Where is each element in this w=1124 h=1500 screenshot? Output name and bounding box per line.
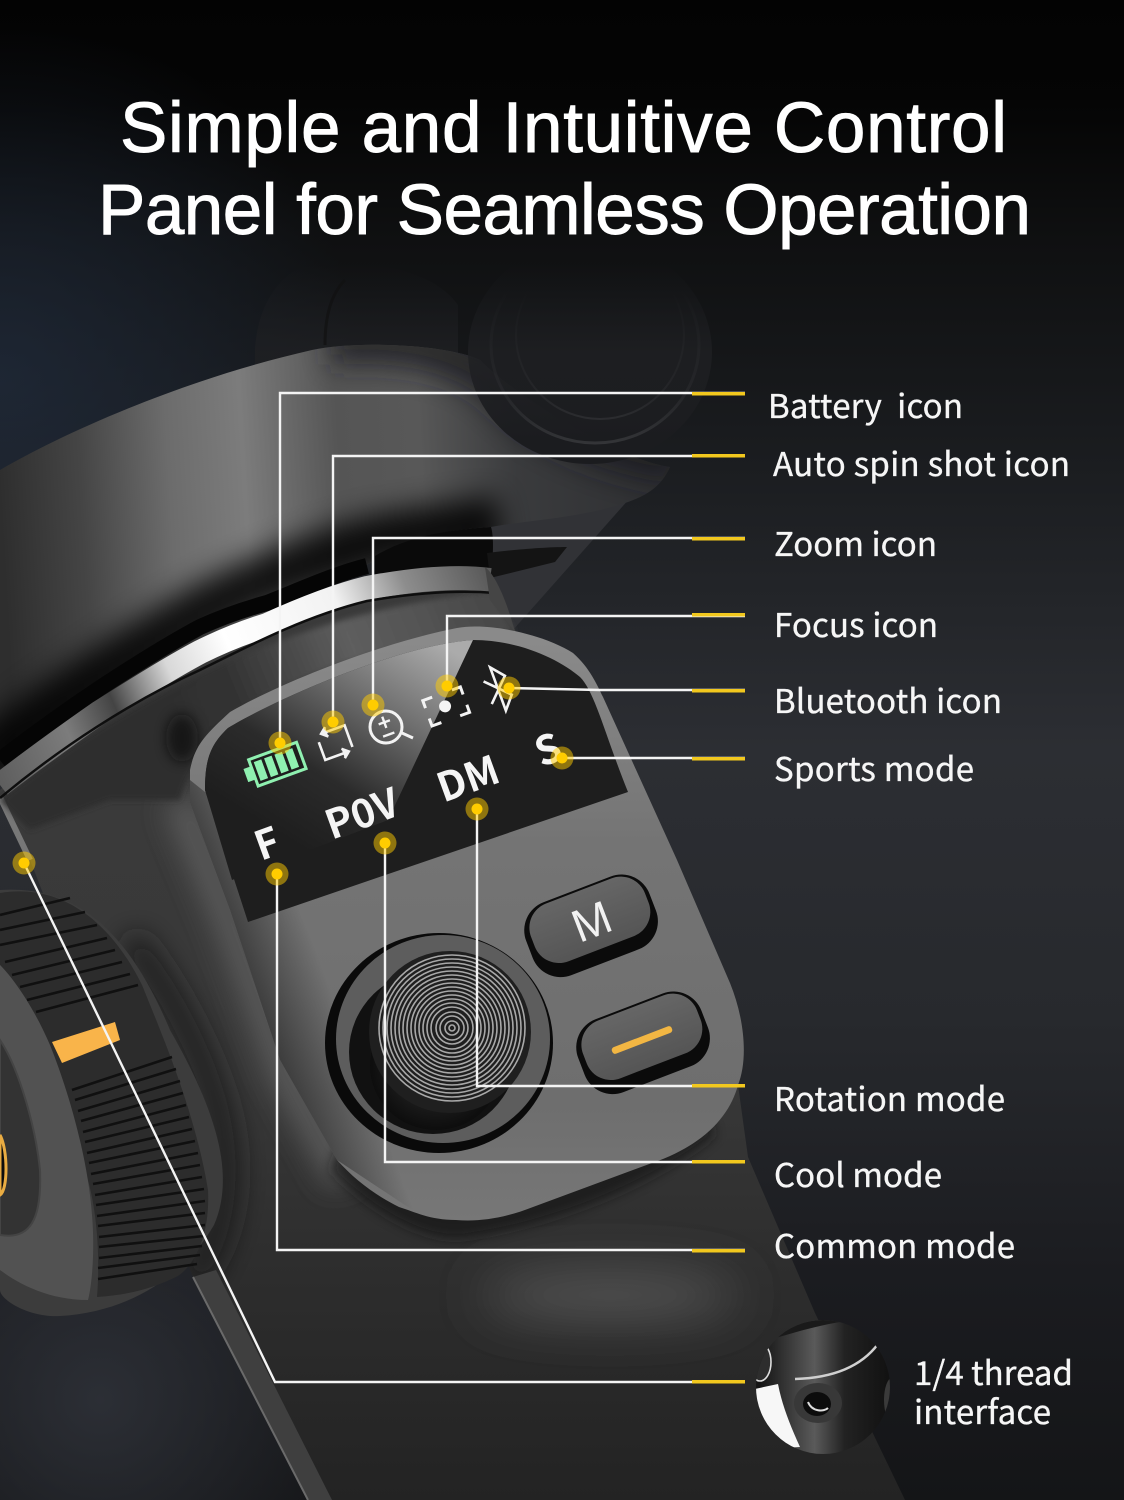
dial marker bbox=[52, 1022, 120, 1063]
screen label DM: DM bbox=[428, 738, 507, 814]
callout: zoom icon bbox=[362, 518, 937, 716]
charging slot bbox=[487, 547, 567, 578]
rear motor disk bbox=[468, 240, 712, 464]
screen label POV: P0V bbox=[316, 771, 407, 851]
panel left shading bbox=[190, 780, 420, 1215]
callout: focus icon: Focus icon bbox=[774, 599, 938, 647]
neck dark shadow bbox=[166, 714, 198, 762]
dial inner hub bbox=[0, 1040, 40, 1236]
metal ring bbox=[0, 566, 515, 798]
collar lower shadow bbox=[0, 522, 500, 765]
icon: auto spin shot bbox=[315, 721, 355, 765]
dial knurled ring bbox=[0, 891, 208, 1297]
title: Simple and Intuitive Control bbox=[120, 89, 1007, 168]
shadow beside dial bbox=[130, 940, 225, 1280]
callout: battery icon bbox=[268, 380, 963, 754]
dial flange bbox=[0, 890, 223, 1316]
callout: bluetooth icon bbox=[498, 675, 1002, 723]
handle and body bbox=[0, 580, 905, 1500]
handle left strip bbox=[193, 1270, 332, 1500]
dial hub dark centre bbox=[0, 1135, 6, 1195]
side dial bbox=[0, 890, 223, 1316]
dial knurl grooves bbox=[0, 898, 205, 1279]
neck below ring bbox=[0, 592, 515, 830]
M button bbox=[515, 866, 667, 986]
callout: battery icon: Battery icon bbox=[768, 380, 963, 428]
upper collar bbox=[0, 330, 680, 790]
soft light beside panel bbox=[180, 800, 345, 1180]
screen reflection bbox=[205, 640, 473, 880]
callout: 1/4 thread interface: 1/4 thread bbox=[914, 1347, 1073, 1395]
callout: auto spin shot icon bbox=[322, 438, 1070, 734]
screen label F: F bbox=[245, 810, 287, 872]
callout: rotation mode: Rotation mode bbox=[774, 1073, 1005, 1121]
inset: thread close-up bbox=[756, 1320, 890, 1454]
callout: focus icon bbox=[436, 599, 938, 698]
callout: cool mode bbox=[374, 832, 942, 1197]
callout: bluetooth icon: Bluetooth icon bbox=[774, 675, 1002, 723]
callout: common mode bbox=[266, 862, 1015, 1268]
record button bbox=[567, 983, 719, 1103]
wedge under collar bbox=[480, 498, 630, 630]
control panel bbox=[190, 627, 744, 1238]
callout: zoom icon: Zoom icon bbox=[774, 518, 937, 566]
device illustration: gimbal bbox=[0, 240, 905, 1500]
callout: sports mode bbox=[550, 743, 974, 791]
rear knob bbox=[255, 263, 458, 365]
handle soft highlight bbox=[480, 1273, 740, 1317]
callout: common mode: Common mode bbox=[774, 1220, 1015, 1268]
collar top fade bbox=[330, 344, 680, 465]
callout: cool mode: Cool mode bbox=[774, 1149, 942, 1197]
dark fill above ring end bbox=[375, 527, 493, 578]
callout: 1/4 thread interface bbox=[12, 852, 1073, 1460]
callout: 1/4 thread interface: interface bbox=[914, 1386, 1051, 1434]
icon: battery bbox=[241, 742, 306, 789]
callout: auto spin shot icon: Auto spin shot icon bbox=[773, 438, 1070, 486]
dial face bbox=[0, 965, 93, 1300]
display screen bbox=[205, 640, 628, 922]
screen label S: S bbox=[526, 716, 569, 779]
panel shadow bbox=[330, 1100, 715, 1238]
callout: rotation mode bbox=[466, 798, 1005, 1121]
icon: zoom bbox=[370, 711, 413, 743]
icon: focus bbox=[423, 687, 470, 726]
title: Panel for Seamless Operation bbox=[98, 171, 1031, 250]
joystick bbox=[325, 933, 553, 1153]
M button: M bbox=[564, 890, 619, 952]
callout: sports mode: Sports mode bbox=[774, 743, 974, 791]
title bbox=[98, 89, 1031, 250]
icon: bluetooth bbox=[480, 664, 516, 714]
